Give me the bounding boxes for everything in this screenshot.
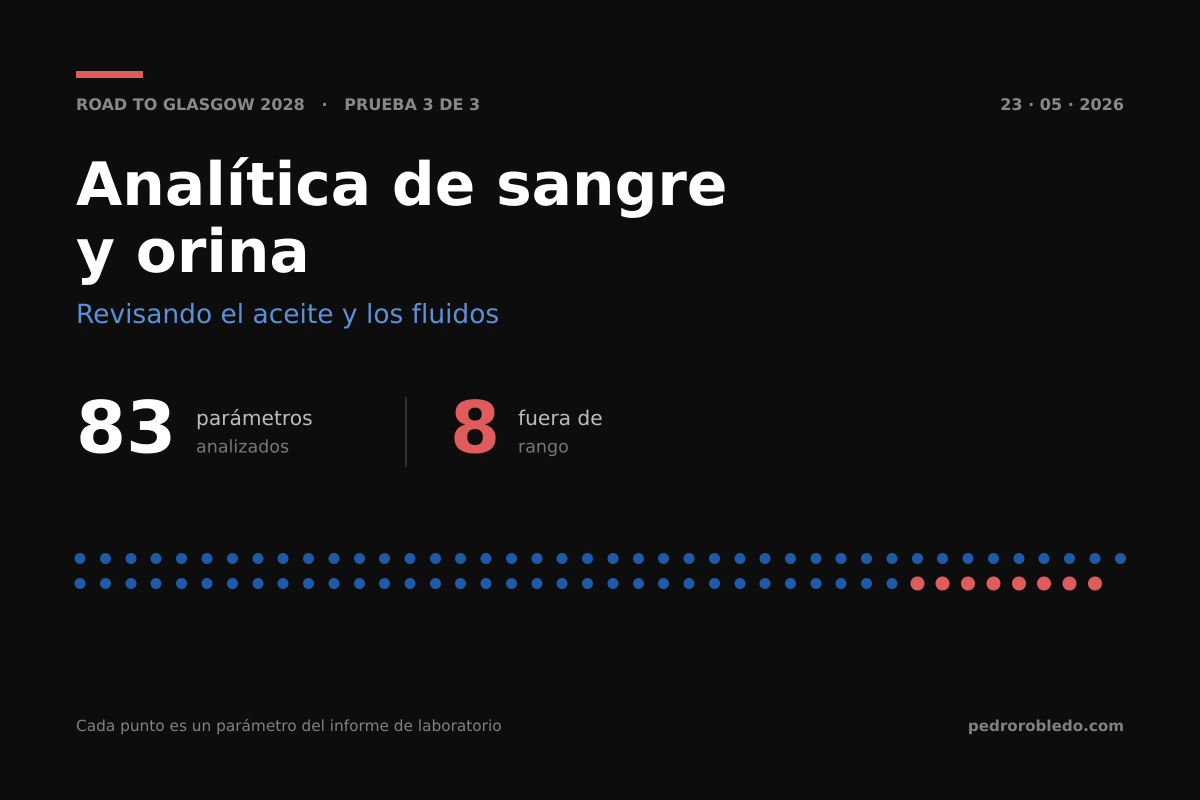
- dots row 2: out of range: [910, 576, 1102, 590]
- footnote: Cada punto es un parámetro del informe de laboratorio: [76, 717, 502, 735]
- title: [76, 150, 727, 287]
- dots row 2: in range: [74, 578, 898, 589]
- date: 23 · 05 · 2026: [1000, 95, 1124, 114]
- stat: out of range: 8: [450, 386, 500, 470]
- subtitle: Revisando el aceite y los fluidos: [76, 299, 499, 330]
- stat: out of range: rango: [518, 438, 569, 458]
- title: y orina: [76, 217, 310, 287]
- eyebrow: event and test: ROAD TO GLASGOW 2028 · PRUEBA 3 DE 3: [76, 95, 480, 114]
- title: Analítica de sangre: [76, 150, 727, 220]
- dots row 1: in range: [74, 553, 1126, 564]
- stat: out of range: fuera de: [518, 406, 603, 430]
- site credit: pedrorobledo.com: [968, 717, 1124, 735]
- stat: out of range: [450, 386, 603, 470]
- accent bar: [76, 71, 143, 78]
- stat: parameters analysed: 83: [76, 386, 176, 470]
- stat: parameters analysed: analizados: [196, 438, 289, 458]
- stat: parameters analysed: parámetros: [196, 406, 313, 430]
- stat: parameters analysed: [76, 386, 313, 470]
- dot grid: 83 parameters: [74, 553, 1126, 590]
